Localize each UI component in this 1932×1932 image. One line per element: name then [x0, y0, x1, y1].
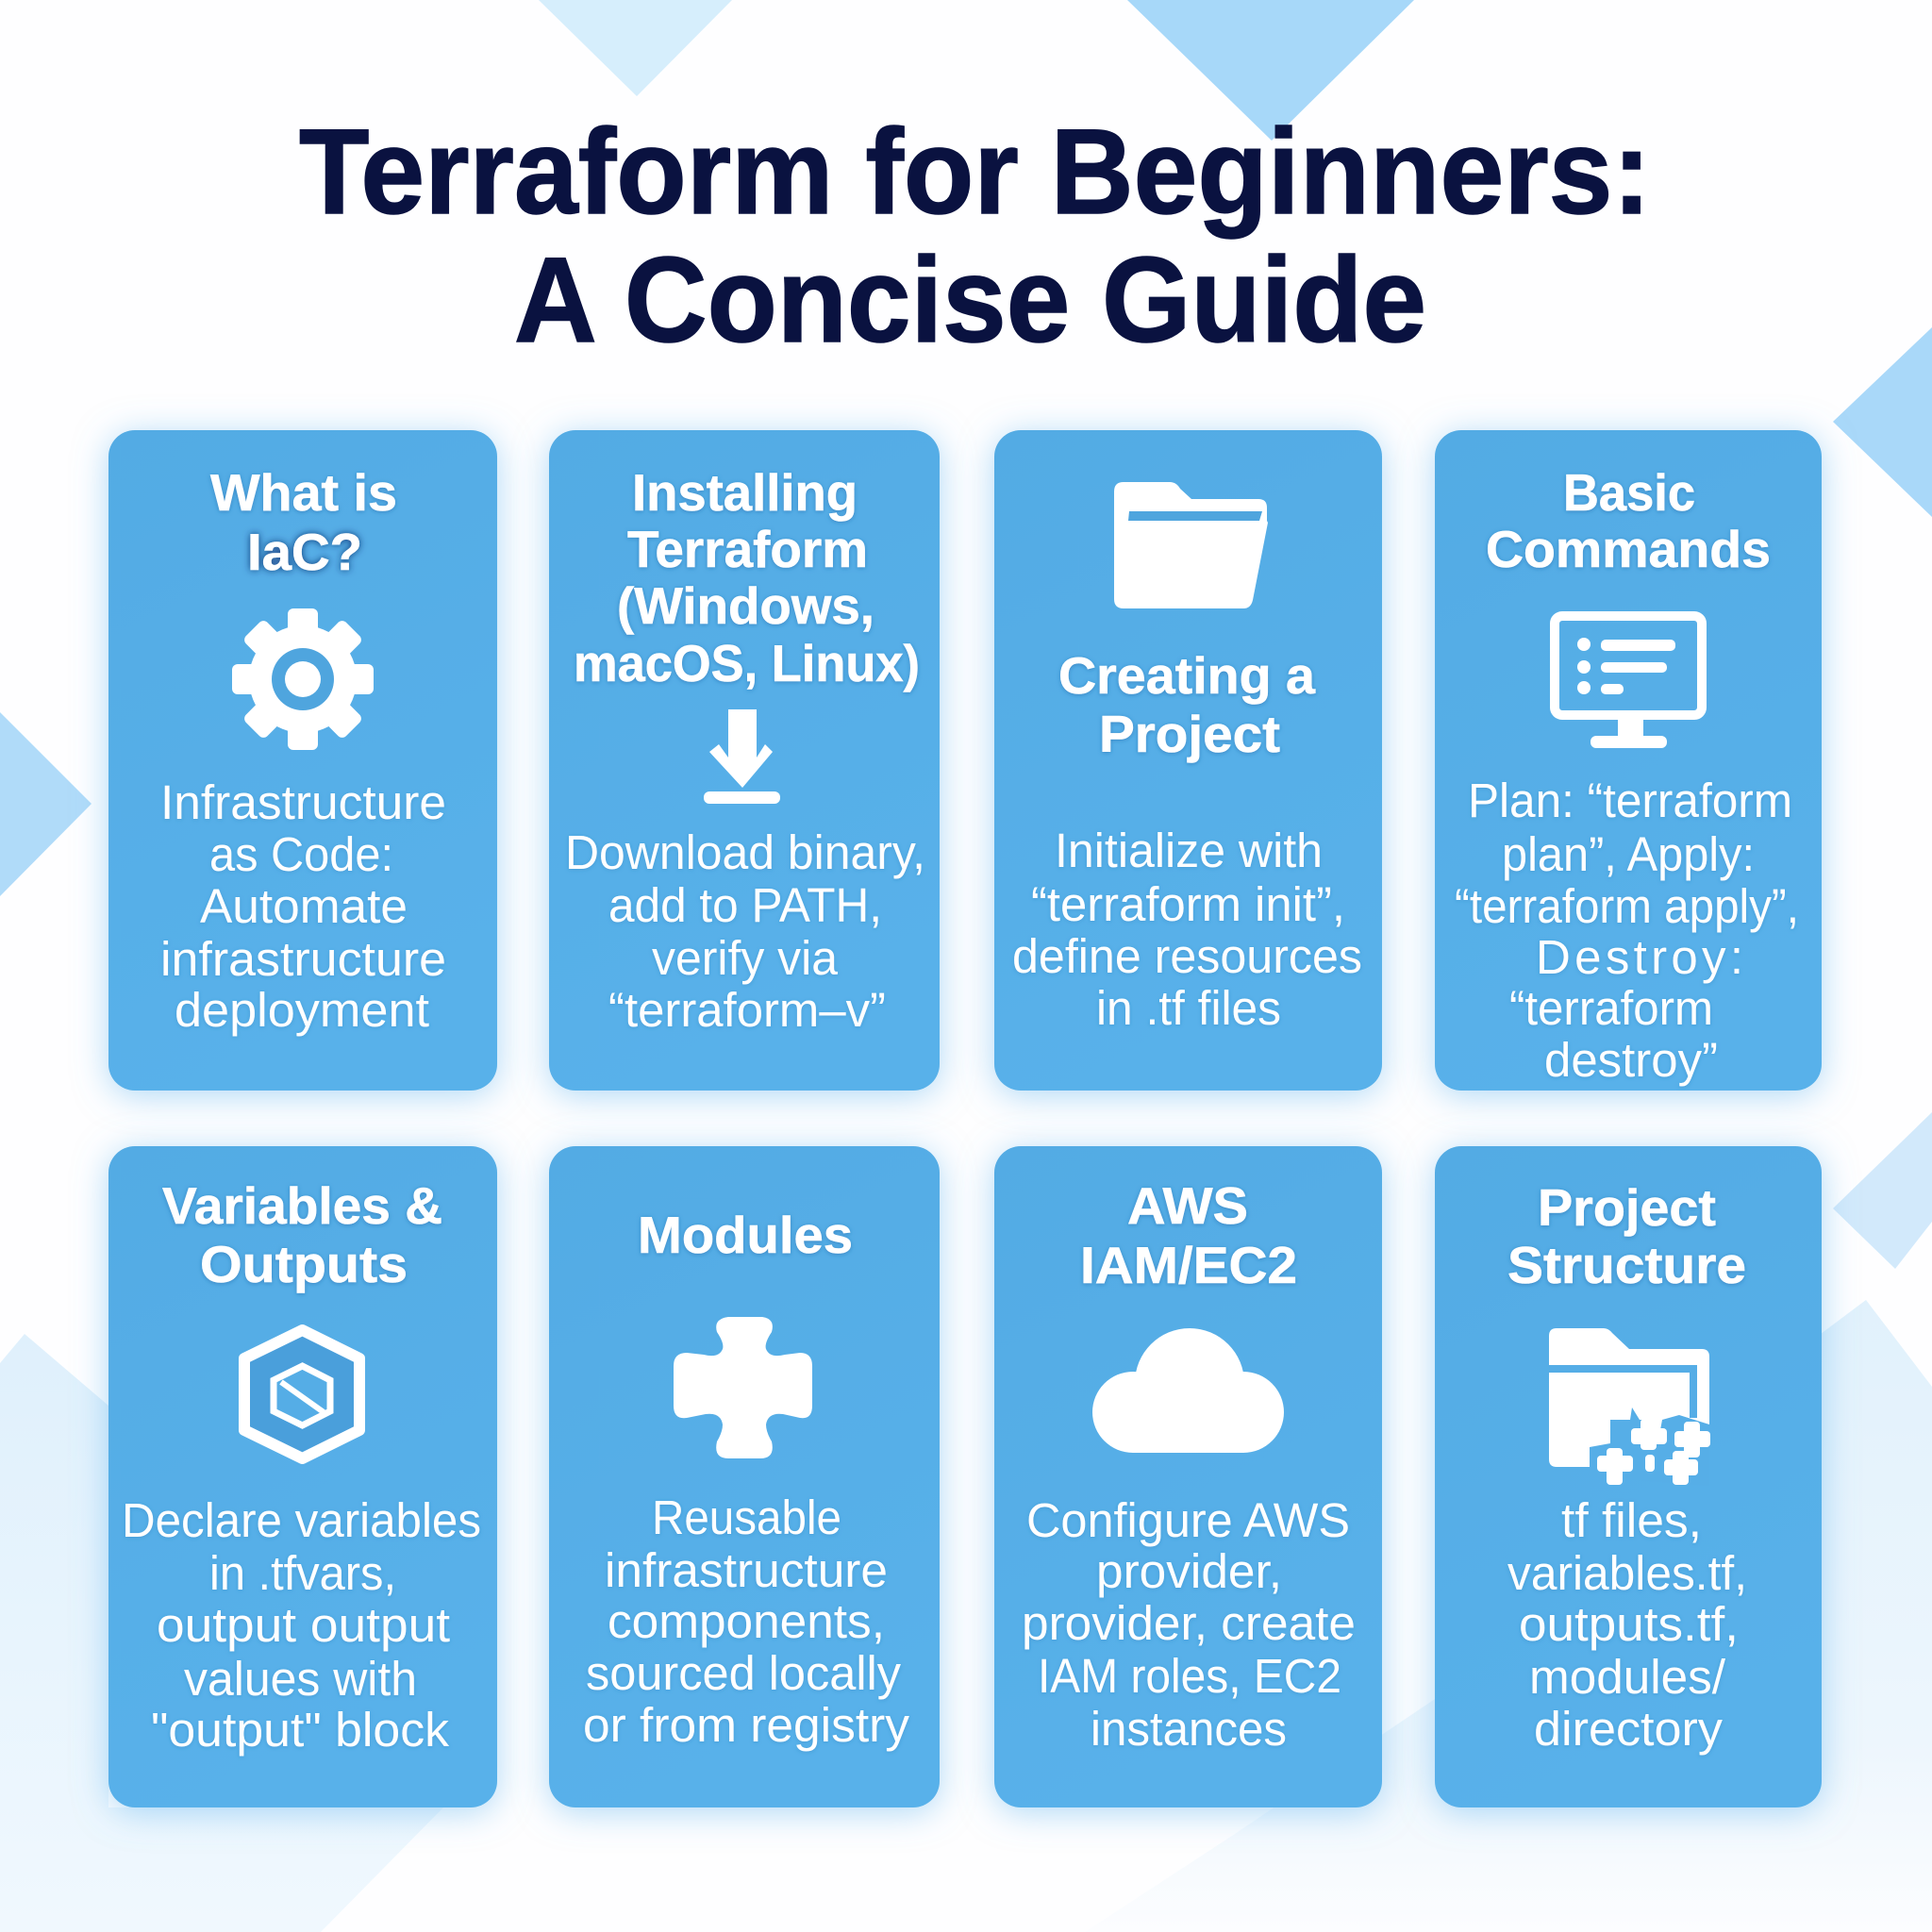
- icon: gear: [232, 608, 374, 750]
- icon: monitor: [1555, 616, 1702, 748]
- description text: plan”, Apply:: [1502, 827, 1755, 881]
- description text: outputs.tf,: [1519, 1597, 1739, 1651]
- heading: Project Structure: [1507, 1178, 1746, 1294]
- heading: Creating a Project: Creating a: [1058, 646, 1315, 705]
- description text: “terraform–v”: [608, 983, 886, 1037]
- description text: Declare variables: [122, 1493, 481, 1547]
- heading: Installing Terraform: (Windows,: [617, 576, 874, 635]
- description text: [160, 775, 446, 1037]
- description text: [1022, 1493, 1356, 1756]
- heading: Variables & Outputs: [162, 1176, 442, 1293]
- description text: verify via: [652, 931, 839, 985]
- description text: sourced locally: [586, 1646, 901, 1700]
- description text: Plan: “terraform: [1468, 774, 1792, 827]
- description text: directory: [1534, 1702, 1724, 1756]
- heading: AWS IAM/EC2: IAM/EC2: [1080, 1236, 1297, 1294]
- panel: Variables & Outputs: [108, 1146, 497, 1807]
- title: [299, 105, 1651, 368]
- description text: define resources: [1012, 929, 1362, 983]
- heading: Variables & Outputs: Outputs: [200, 1235, 408, 1293]
- description text: Initialize with: [1055, 824, 1323, 877]
- description text: infrastructure: [160, 932, 446, 986]
- panel: AWS IAM/EC2: [994, 1146, 1382, 1807]
- heading: Installing Terraform: macOS, Linux): [574, 634, 920, 692]
- heading: Creating a Project: [1058, 646, 1315, 763]
- description text: output output: [157, 1598, 450, 1652]
- description text: [565, 825, 925, 1037]
- panel: Project Structure: [1435, 1146, 1822, 1807]
- description text: Infrastructure: [160, 775, 446, 829]
- panel: Modules: [549, 1146, 940, 1807]
- description text: variables.tf,: [1507, 1546, 1747, 1600]
- heading: What is IaC?: IaC?: [247, 523, 362, 581]
- description text: values with: [184, 1652, 417, 1706]
- description text: [1012, 824, 1362, 1035]
- icon: download arrow: [704, 709, 780, 804]
- description text: [1455, 774, 1799, 1087]
- description text: as Code:: [209, 827, 393, 881]
- heading: What is IaC?: [210, 463, 397, 581]
- icon: folder: [1114, 482, 1268, 608]
- description text: [122, 1493, 481, 1757]
- panel: Basic Commands: [1435, 430, 1822, 1091]
- title: A Concise Guide: [514, 233, 1426, 368]
- description text: destroy”: [1544, 1033, 1718, 1087]
- description text: components,: [608, 1594, 885, 1648]
- description text: in .tfvars,: [209, 1546, 396, 1600]
- title: Terraform for Beginners:: [299, 105, 1651, 240]
- description text: modules/: [1529, 1650, 1726, 1704]
- description text: provider, create: [1022, 1596, 1356, 1650]
- description text: [1507, 1493, 1747, 1756]
- heading: Installing Terraform: [574, 463, 920, 692]
- description text: “terraform apply”,: [1455, 879, 1799, 933]
- description text: Destroy:: [1536, 930, 1743, 984]
- icon: folder with modules: [1549, 1328, 1710, 1486]
- heading: What is IaC?: What is: [210, 463, 397, 522]
- heading: AWS IAM/EC2: [1080, 1176, 1297, 1294]
- heading: Project Structure: Structure: [1507, 1236, 1746, 1294]
- description text: “terraform init”,: [1031, 877, 1345, 931]
- panel: What is IaC?: [108, 430, 497, 1091]
- description text: IAM roles, EC2: [1038, 1649, 1341, 1703]
- description text: infrastructure: [605, 1543, 888, 1597]
- heading: AWS IAM/EC2: AWS: [1127, 1176, 1248, 1235]
- heading: Installing Terraform: Installing: [632, 463, 858, 522]
- description text: Configure AWS: [1026, 1493, 1350, 1547]
- heading: Modules: Modules: [638, 1206, 853, 1264]
- description text: tf files,: [1561, 1493, 1702, 1547]
- description text: or from registry: [583, 1698, 909, 1752]
- description text: “terraform: [1509, 981, 1713, 1035]
- heading: Project Structure: Project: [1538, 1178, 1716, 1237]
- description text: provider,: [1096, 1544, 1282, 1598]
- description text: instances: [1091, 1702, 1287, 1756]
- panel: Creating a Project: [994, 430, 1382, 1091]
- panel: Installing Terraform: [549, 430, 940, 1091]
- heading: Variables & Outputs: Variables &: [162, 1176, 442, 1235]
- heading: Installing Terraform: Terraform: [627, 520, 868, 578]
- icon: puzzle piece: [674, 1317, 812, 1458]
- heading: Basic Commands: Commands: [1486, 520, 1771, 578]
- heading: Creating a Project: Project: [1099, 705, 1280, 763]
- description text: deployment: [175, 983, 429, 1037]
- heading: Basic Commands: Basic: [1563, 463, 1695, 522]
- description text: add to PATH,: [608, 878, 882, 932]
- description text: Automate: [200, 879, 408, 933]
- description text: in .tf files: [1096, 981, 1281, 1035]
- icon: hexagon: [244, 1330, 359, 1458]
- description text: Download binary,: [565, 825, 925, 879]
- description text: "output" block: [151, 1703, 450, 1757]
- description text: [583, 1491, 909, 1752]
- description text: Reusable: [652, 1491, 841, 1544]
- heading: Basic Commands: [1486, 463, 1771, 578]
- icon: cloud: [1092, 1328, 1284, 1453]
